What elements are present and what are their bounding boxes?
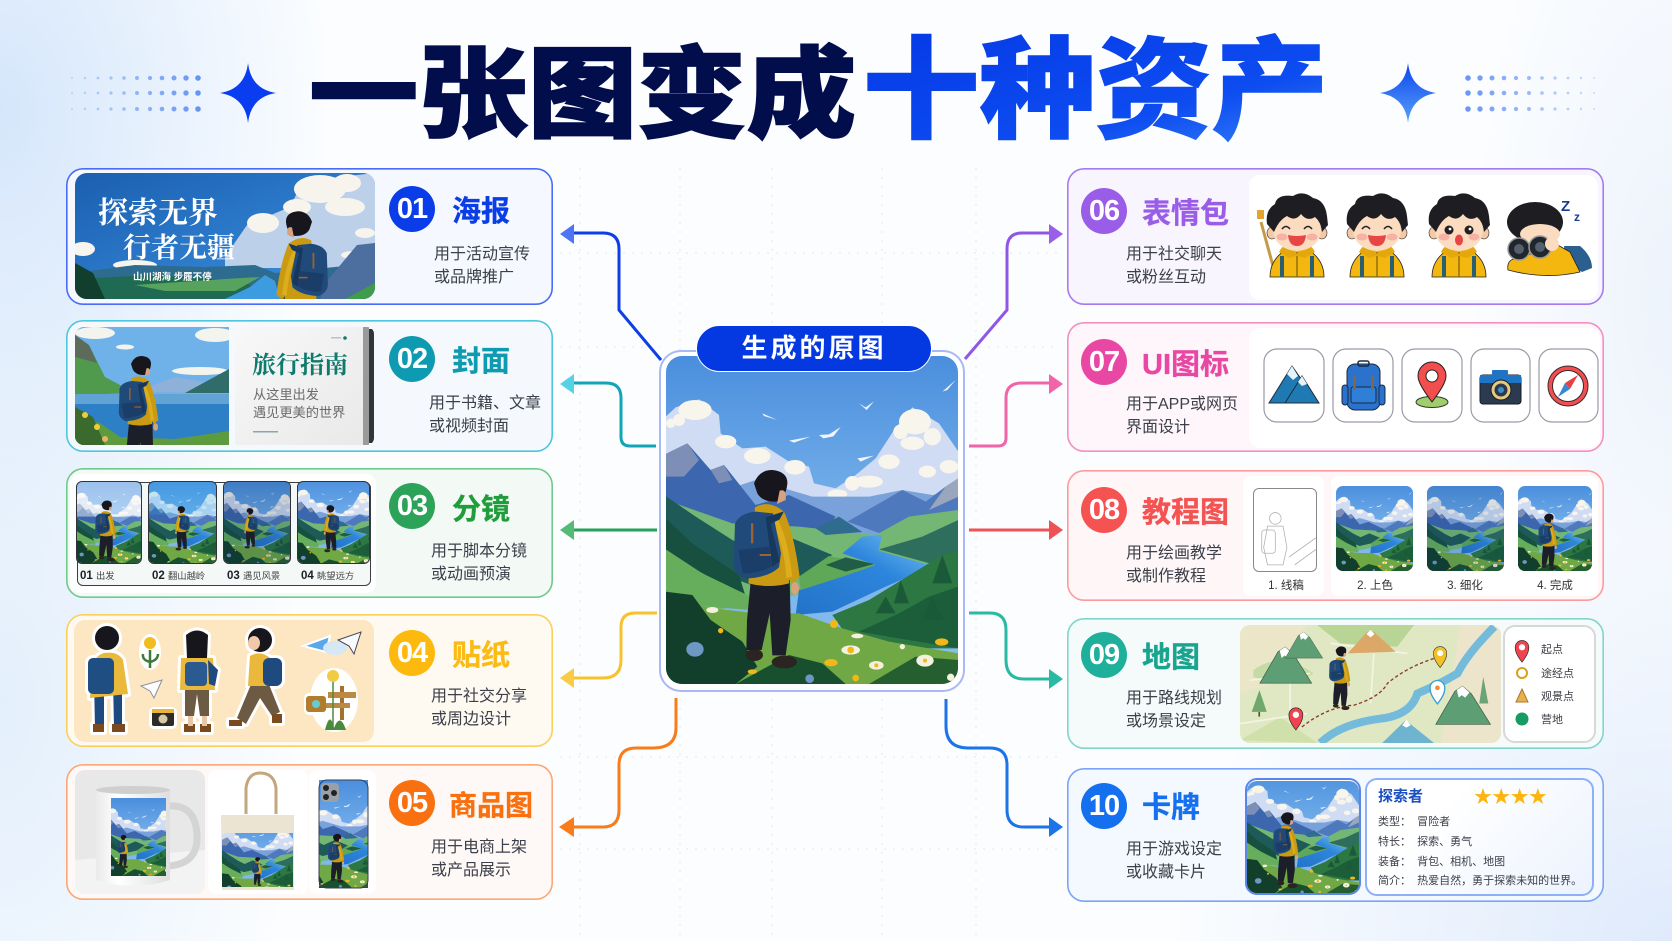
emoji sheet [1249,175,1598,300]
heading 10: 卡牌 [1142,792,1200,824]
badge 03: 03 [397,490,427,522]
image frame [659,350,965,692]
step 4 image [1518,486,1592,571]
card image frame [1245,778,1361,895]
heading 02: 封面 [452,346,510,378]
arrow to 06 [965,224,1063,359]
badge 05: 05 [397,787,427,819]
rating stars: ★★★★ [1474,787,1547,807]
arrow to 09 [969,613,1063,689]
description 10: 用于游戏设定 [1126,841,1222,858]
panel 02 cover [66,320,553,452]
badge 01: 01 [397,193,427,225]
step captions [1268,578,1573,592]
left decoration: dots and star [71,63,276,123]
poster heading line 2: 行者无疆 [123,232,235,264]
description 01 [434,245,530,286]
panel 06 emoji [1067,168,1604,305]
description 07: 界面设计 [1126,418,1190,436]
description 03 [431,542,527,582]
arrow to 03 [560,520,657,540]
description 05: 或产品展示 [431,862,511,878]
label pill [696,325,932,372]
badge 08: 08 [1089,494,1119,526]
frame captions: 01 出发 [80,570,115,582]
badge 04 [389,630,435,676]
label pill: 生成的原图 [741,333,886,363]
right decoration: star and dots [1380,63,1595,123]
steps 2-4 card [1331,476,1598,596]
frame 3 [223,481,291,564]
badge 02 [389,336,435,382]
legend items: 起点 [1541,643,1563,656]
map image [1240,625,1501,743]
heading 03: 分镜 [452,494,510,526]
sticker: flower [139,634,161,670]
description 03: 或动画预演 [431,566,511,582]
emoji: laughing [1347,193,1408,277]
description 07 [1126,396,1238,436]
map legend [1503,625,1596,743]
frame 2 [148,481,217,564]
description 01: 或品牌推广 [434,268,514,286]
product: phone case [309,770,376,894]
character stats: 特长： 探索、勇气 [1378,836,1472,848]
heading 07: UI图标 [1142,349,1229,381]
panel 08 tutorial [1067,470,1604,601]
step 3 image [1427,486,1504,571]
description 06: 或粉丝互动 [1126,268,1206,286]
panel 04 stickers [66,614,553,747]
badge 09 [1081,632,1127,678]
sleep letter large: Z [1561,198,1570,215]
step captions: 2. 上色 [1357,578,1393,592]
arrow to 07 [969,374,1063,446]
badge 08 [1081,487,1127,533]
emoji: happy with stick [1257,193,1328,277]
sticker: planes [303,632,361,655]
arrow to 01 [560,224,661,360]
badge 06 [1081,188,1127,234]
sticker: signpost and flowers [304,668,358,732]
legend items [1514,640,1574,726]
sticker: camera [149,707,177,729]
arrow to 05 [559,698,676,837]
poster image [75,173,375,299]
panel 09 map [1067,618,1604,749]
legend items: 营地 [1541,712,1563,726]
emoji: surprised [1429,193,1490,277]
title [309,30,1328,153]
icon: backpack [1342,361,1385,410]
character name: 探索者 [1378,788,1423,805]
emoji: binoculars [1507,202,1592,276]
step 1 card [1243,476,1324,596]
sticker: paper plane [141,680,162,698]
panel 01 poster [66,168,553,305]
storyboard frame [77,482,371,586]
character stats: 装备： 背包、相机、地图 [1378,856,1505,868]
poster tagline: 山川湖海 步履不停 [133,271,212,283]
step captions: 4. 完成 [1537,578,1573,592]
frame captions [80,570,354,582]
sleep letter small: z [1574,210,1580,224]
arrow to 08 [969,520,1063,540]
description 08 [1126,544,1222,584]
step captions: 1. 线稿 [1268,578,1304,592]
center panel: original image [659,326,965,692]
book subtitle: 从这里出发 [253,386,319,402]
heading 09: 地图 [1142,642,1200,674]
description 07: 用于APP或网页 [1126,396,1238,413]
icon: mountain [1269,366,1319,403]
description 02: 用于书籍、文章 [429,395,541,412]
heading 05: 商品图 [449,790,533,821]
sticker: hiker walking [229,628,282,726]
arrow to 10 [946,699,1063,837]
frame 4 [297,481,370,564]
product: mug [75,770,205,894]
panel 03 storyboard [66,468,553,598]
badge 02: 02 [397,343,427,375]
sticker sheet [74,620,374,742]
sticker: hiker back [88,626,128,732]
arrow to 02 [560,374,656,446]
frame 1 [76,481,142,564]
heading 08: 教程图 [1142,497,1229,529]
title part 2: 十种资产 [863,30,1328,153]
sticker: hiker front [180,630,218,732]
card info [1365,778,1594,896]
cover image [75,327,229,445]
description 02: 或视频封面 [429,418,509,434]
description 03: 用于脚本分镜 [431,543,527,560]
badge 05 [389,780,435,826]
frame captions: 03 遇见风景 [227,570,280,582]
card image [1247,781,1359,893]
description 10: 或收藏卡片 [1126,864,1206,880]
description 08: 或制作教程 [1126,568,1206,584]
badge 06: 06 [1089,195,1119,227]
title part 1: 一张图变成 [309,39,856,150]
arrow to 04 [560,613,657,688]
panel 07 UI icons [1067,322,1604,452]
step 1 sketch [1253,488,1317,572]
badge 09: 09 [1089,639,1119,671]
storyboard sheet [70,474,376,593]
badge 10: 10 [1089,790,1119,822]
heading 01: 海报 [452,196,510,228]
description 02 [429,394,541,434]
product: tote bag [208,770,308,894]
character stats: 类型： 冒险者 [1378,816,1450,828]
badge 03 [389,483,435,529]
description 09 [1126,689,1222,730]
book cover [235,327,374,445]
panel 10 card [1067,768,1604,902]
step captions: 3. 细化 [1447,578,1483,592]
description 05 [431,838,527,878]
poster heading: 探索无界 [98,197,218,230]
description 01: 用于活动宣传 [434,246,530,263]
icon: camera [1480,370,1521,404]
description 06: 用于社交聊天 [1126,246,1222,263]
character stats [1378,816,1582,887]
legend items: 途经点 [1541,666,1574,680]
badge 07: 07 [1089,346,1119,378]
description 08: 用于绘画教学 [1126,545,1222,562]
heading 06: 表情包 [1142,198,1229,230]
book title: 旅行指南 [252,351,348,379]
description 04: 用于社交分享 [431,688,527,705]
icon: location pin [1416,362,1448,408]
description 09: 用于路线规划 [1126,690,1222,707]
badge 07 [1081,339,1127,385]
icon: compass [1548,366,1588,406]
description 10 [1126,840,1222,880]
description 04 [431,687,527,728]
step 2 image [1336,486,1413,571]
badge 10 [1081,783,1127,829]
original illustration [666,356,958,684]
panel 05 products [66,764,553,900]
description 09: 或场景设定 [1126,712,1206,730]
description 05: 用于电商上架 [431,839,527,856]
icon sheet [1249,328,1600,448]
book subtitle line 2: 遇见更美的世界 [253,405,345,420]
badge 01 [389,186,435,232]
heading 04: 贴纸 [452,640,510,672]
legend items: 观景点 [1541,690,1574,703]
description 06 [1126,245,1222,286]
frame captions: 04 眺望远方 [301,570,354,582]
description 04: 或周边设计 [431,710,511,728]
badge 04: 04 [397,637,427,669]
character stats: 简介： 热爱自然，勇于探索未知的世界。 [1378,875,1582,887]
frame captions: 02 翻山越岭 [152,570,205,582]
